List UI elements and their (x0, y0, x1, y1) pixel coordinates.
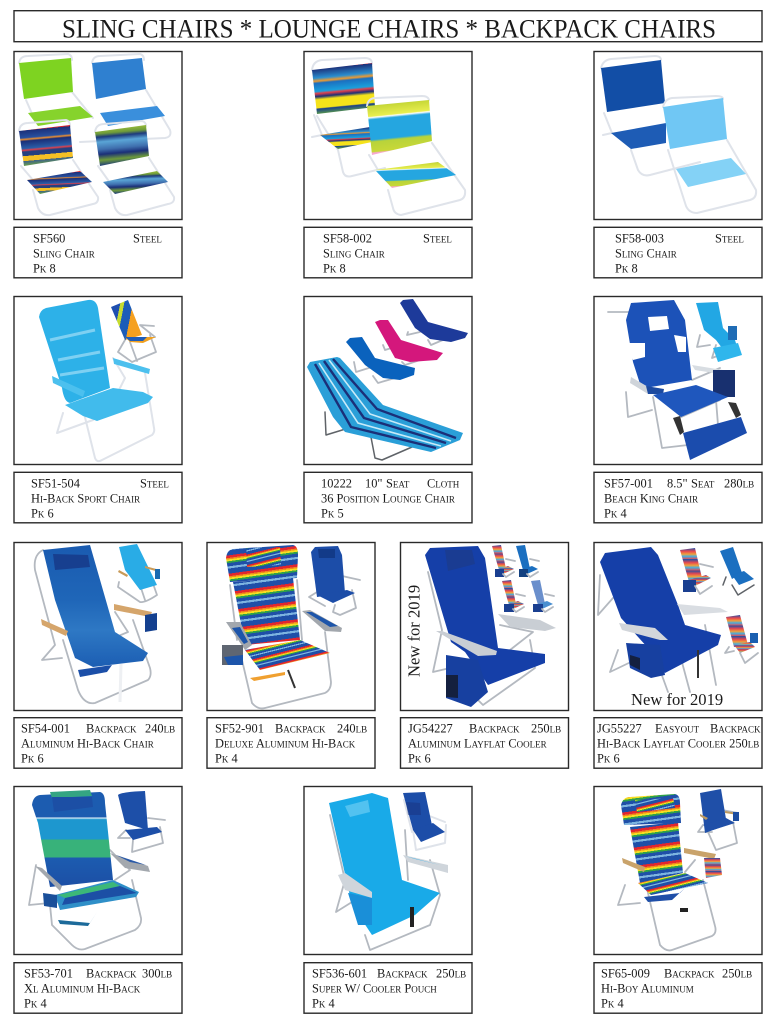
caption: 10222: 10" (365, 476, 382, 490)
caption: SF58-002: Pk 8 (323, 261, 346, 275)
caption: 10222: Cloth (427, 476, 460, 490)
caption: 10222: 10222 (321, 476, 352, 490)
caption: JG54227: Pk 6 (408, 752, 431, 766)
caption: SF58-002: SF58-002 (323, 231, 372, 245)
caption: SF51-504: Steel (140, 476, 169, 490)
caption: SF53-701: Backpack (86, 967, 137, 981)
caption: SF54-001: SF54-001 (21, 722, 70, 736)
caption: JG54227: JG54227 (408, 722, 453, 736)
caption: JG55227: Easyout (655, 722, 700, 736)
icon: blue sling chair (80, 54, 170, 142)
caption: SF51-504: Pk 6 (31, 506, 54, 520)
caption: SF54-001: 240lb (145, 722, 175, 736)
caption: SF58-003: SF58-003 (615, 231, 664, 245)
caption: SF57-001 (594, 472, 762, 523)
panel: SF54-001 backpack chair (14, 542, 182, 710)
caption: SF54-001: Aluminum Hi-Back Chair (21, 737, 154, 751)
icon: green and blue sling chair (367, 96, 465, 215)
caption: SF560: Steel (133, 231, 162, 245)
icon: small colored chairs (680, 547, 758, 663)
caption: JG54227: Aluminum Layflat Cooler (408, 737, 547, 751)
icon: navy sling chair (601, 56, 700, 175)
caption: SF65-009: Hi-Boy Aluminum (601, 982, 694, 996)
icon: red striped sling chair (19, 120, 98, 215)
icon: large aqua chair (39, 300, 154, 461)
icon: large green and blue chair (29, 790, 150, 950)
caption: SF51-504 (14, 472, 182, 523)
title: SLING CHAIRS * LOUNGE CHAIRS * BACKPACK CHAIRS (62, 14, 716, 43)
caption: JG55227: JG55227 (597, 722, 642, 736)
caption: SF58-002: Sling Chair (323, 246, 385, 260)
caption: 10222: 36 Position Lounge Chair (321, 491, 455, 505)
caption: SF65-009: 250lb (722, 967, 752, 981)
panel: SF51-504 hi-back chair (14, 296, 182, 464)
caption: SF58-003: Sling Chair (615, 246, 677, 260)
caption: SF58-003: Pk 8 (615, 261, 638, 275)
caption: SF57-001: Beach King Chair (604, 491, 698, 505)
panel: SF58-002 sling chairs (304, 52, 472, 220)
caption: SF560: SF560 (33, 231, 65, 245)
caption: SF57-001: 8.5" (667, 476, 688, 490)
caption: SF52-901: 240lb (337, 722, 367, 736)
caption: SF58-002 (304, 227, 472, 278)
icon: large royal blue chair (608, 300, 747, 460)
caption: SF536-601: 250lb (436, 967, 466, 981)
icon: large rainbow chair (618, 794, 722, 950)
caption: SF52-901: Pk 4 (215, 752, 238, 766)
caption: SF560: Pk 8 (33, 261, 56, 275)
caption: SF536-601 (304, 963, 472, 1013)
caption: SF57-001: Pk 4 (604, 506, 627, 520)
caption: SF51-504: Hi-Back Sport Chair (31, 491, 140, 505)
icon: large blue chair (35, 545, 157, 703)
icon: large blue cooler chair (425, 546, 556, 707)
panel: 10222 lounge chairs (304, 296, 472, 464)
caption: SF57-001: SF57-001 (604, 476, 653, 490)
caption: SF52-901: Backpack (275, 722, 326, 736)
caption: SF53-701: SF53-701 (24, 967, 73, 981)
caption: SF65-009 (594, 963, 762, 1013)
caption: JG55227 (594, 718, 762, 768)
caption: JG55227: Backpack (710, 722, 761, 736)
icon: small navy chair (403, 792, 446, 850)
icon: green sling chair (19, 54, 93, 126)
caption: SF52-901 (207, 718, 375, 768)
icon: small turquoise chair (696, 302, 742, 362)
caption: SF65-009: Pk 4 (601, 997, 624, 1011)
icon: pink lounger (375, 320, 443, 365)
caption: SF65-009: SF65-009 (601, 967, 650, 981)
caption: JG55227: Pk 6 (597, 752, 620, 766)
caption: SF57-001: Seat (691, 476, 715, 490)
caption: SF58-003 (594, 227, 762, 278)
caption: JG54227 (400, 718, 568, 768)
text: New for 2019 vertical: New for 2019 (404, 585, 424, 677)
panel: JG55227 easyout (594, 542, 762, 710)
caption: JG55227: Hi-Back Layflat Cooler 250lb (597, 737, 759, 751)
icon: blue lounger (346, 337, 415, 383)
icon: large rainbow chair (222, 545, 342, 708)
caption: 10222: Pk 5 (321, 506, 344, 520)
panel: SF560 sling chair (14, 52, 182, 220)
icon: small navy chair (118, 791, 165, 852)
caption: JG54227: 250lb (531, 722, 561, 736)
caption: SF53-701: 300lb (142, 967, 172, 981)
panel: SF53-701 XL hi-back (14, 786, 182, 954)
icon: small light blue chair (118, 544, 160, 602)
panel: SF58-003 sling chairs (594, 52, 762, 220)
icon: small navy chair (698, 789, 739, 850)
icon: small striped chairs (492, 545, 554, 612)
panel: SF65-009 hi-boy (594, 786, 762, 954)
caption: SF57-001: 280lb (724, 476, 754, 490)
icon: small striped chair (111, 300, 156, 362)
caption: SF58-002: Steel (423, 231, 452, 245)
caption: SF560: Sling Chair (33, 246, 95, 260)
text: New for 2019: New for 2019 (631, 690, 723, 709)
icon: green striped sling chair (95, 121, 174, 215)
icon: small navy chair (309, 546, 360, 615)
panel: SF536-601 super chair (304, 786, 472, 954)
caption: SF52-901: Deluxe Aluminum Hi-Back (215, 737, 356, 751)
icon: striped lounger (307, 357, 463, 460)
panel: SF52-901 backpack chair (207, 542, 375, 710)
caption: SF58-003: Steel (715, 231, 744, 245)
caption: SF53-701: Xl Aluminum Hi-Back (24, 982, 141, 996)
icon: navy lounger (400, 299, 468, 345)
icon: large blue easyout chair (598, 547, 728, 692)
panel: SF57-001 beach king chair (594, 296, 762, 464)
caption: SF536-601: Backpack (377, 967, 428, 981)
caption: SF560 (14, 227, 182, 278)
caption: SF53-701 (14, 963, 182, 1013)
caption: SF536-601: Pk 4 (312, 997, 335, 1011)
caption: JG54227: Backpack (469, 722, 520, 736)
caption: SF54-001: Backpack (86, 722, 137, 736)
caption: SF65-009: Backpack (664, 967, 715, 981)
caption: SF536-601: SF536-601 (312, 967, 367, 981)
caption: SF54-001 (14, 718, 182, 768)
panel: JG54227 layflat cooler (400, 542, 568, 710)
caption: 10222: Seat (386, 476, 410, 490)
icon: rainbow sling chair (312, 58, 385, 176)
icon: large sky blue chair (329, 793, 448, 950)
caption: SF54-001: Pk 6 (21, 752, 44, 766)
caption: SF51-504: SF51-504 (31, 476, 80, 490)
icon: sky blue sling chair (663, 96, 756, 213)
caption: SF52-901: SF52-901 (215, 722, 264, 736)
caption: SF53-701: Pk 4 (24, 997, 47, 1011)
caption: 10222 (304, 472, 472, 523)
caption: SF536-601: Super W/ Cooler Pouch (312, 982, 437, 996)
